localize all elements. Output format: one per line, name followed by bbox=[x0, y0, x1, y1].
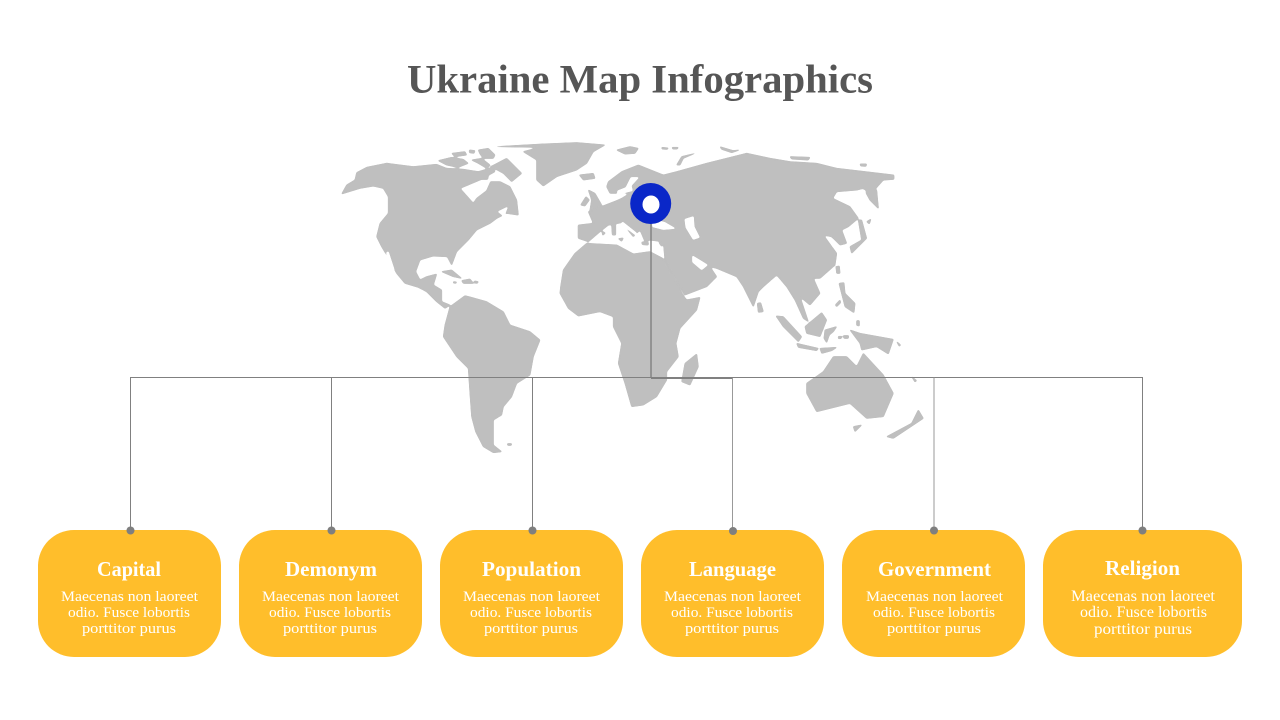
card: demonym: Demonym bbox=[285, 557, 378, 581]
card: language: odio. Fusce lobortis bbox=[671, 605, 793, 621]
card: capital: odio. Fusce lobortis bbox=[68, 605, 190, 621]
card: religion: Religion bbox=[1105, 556, 1180, 580]
world map bbox=[342, 143, 923, 453]
card: demonym: porttitor purus bbox=[283, 621, 377, 637]
card: religion bbox=[1043, 526, 1242, 657]
card: demonym: Maecenas non laoreet bbox=[262, 589, 399, 605]
card: language: Language bbox=[689, 557, 776, 581]
card: language: porttitor purus bbox=[685, 621, 779, 637]
location pin bbox=[630, 183, 671, 224]
card: government bbox=[842, 526, 1025, 657]
card: capital: Maecenas non laoreet bbox=[61, 589, 198, 605]
card: population: Population bbox=[482, 557, 581, 581]
card: government: odio. Fusce lobortis bbox=[873, 605, 995, 621]
card: language bbox=[641, 527, 824, 657]
card: religion: odio. Fusce lobortis bbox=[1080, 604, 1207, 621]
card: capital bbox=[38, 526, 221, 657]
card: religion: porttitor purus bbox=[1094, 621, 1192, 638]
card: government: Government bbox=[878, 557, 991, 581]
card: population: Maecenas non laoreet bbox=[463, 589, 600, 605]
card: religion: Maecenas non laoreet bbox=[1071, 588, 1216, 605]
card: population: odio. Fusce lobortis bbox=[470, 605, 592, 621]
card: demonym bbox=[239, 526, 422, 657]
card: government: Maecenas non laoreet bbox=[866, 589, 1003, 605]
card: capital: Capital bbox=[97, 557, 161, 581]
card: demonym: odio. Fusce lobortis bbox=[269, 605, 391, 621]
card: government: porttitor purus bbox=[887, 621, 981, 637]
title: Ukraine Map Infographics bbox=[407, 56, 873, 102]
card: language: Maecenas non laoreet bbox=[664, 589, 801, 605]
connector lines bbox=[130, 224, 1142, 530]
card: capital: porttitor purus bbox=[82, 621, 176, 637]
card: population bbox=[440, 526, 623, 657]
card: population: porttitor purus bbox=[484, 621, 578, 637]
